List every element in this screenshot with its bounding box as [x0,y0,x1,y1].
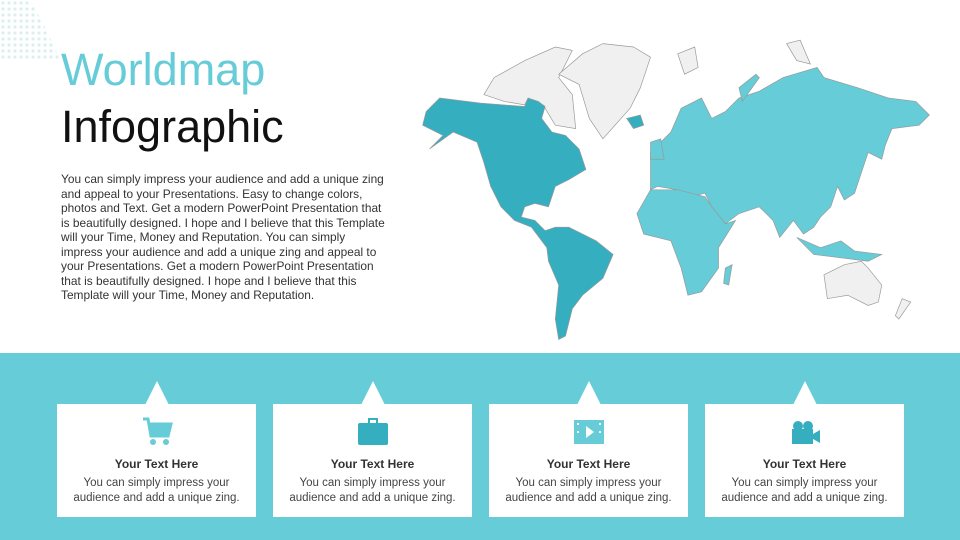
card 4: camera: You can simply impress your [732,477,877,489]
card 3: video: You can simply impress your [516,477,661,489]
text block: impress your audience and add a unique zing and appeal to [61,244,376,258]
text block [61,172,385,302]
card 4: camera: Your Text Here [763,457,846,471]
text block: and appeal to your Presentations. Easy to change colors, [61,186,362,200]
icon: film [574,420,604,444]
card 2: briefcase [273,404,472,517]
card 1: shopping [57,404,256,517]
card 4: camera [705,404,904,517]
text block: is beautifully designed. I hope and I believe that this Template [61,216,385,230]
bottom band [0,353,960,540]
map: americas [423,98,644,339]
card 4: camera: audience and add a unique zing. [721,492,888,504]
card 1: shopping: audience and add a unique zing. [73,492,240,504]
map: eurasia & africa [637,67,929,295]
card 2: briefcase: audience and add a unique zing. [289,492,456,504]
map: australia [824,261,911,319]
card 1: shopping: Your Text Here [115,457,198,471]
text block: photos and Text. Get a modern PowerPoint Presentation that [61,201,381,215]
text block: that is beautifully designed. I hope and I believe that this [61,274,356,288]
icon: video camera [792,421,820,444]
card 3: video: Your Text Here [547,457,630,471]
text block: your Presentations. Get a modern PowerPoint Presentation [61,259,374,273]
title [61,44,284,152]
card 1: shopping: You can simply impress your [84,477,229,489]
decorative dots [2,2,58,58]
map: arctic & greenland [484,40,810,139]
card 3: video: audience and add a unique zing. [505,492,672,504]
text block: Template will your Time, Money and Reputation. [61,288,314,302]
card 2: briefcase: You can simply impress your [300,477,445,489]
world map [422,40,930,340]
title: Worldmap [61,44,265,95]
icon: briefcase [358,418,388,445]
icon: cart [143,418,173,445]
card 2: briefcase: Your Text Here [331,457,414,471]
card 3: video [489,404,688,517]
title: Infographic [61,101,284,152]
text block: will your Time, Money and Reputation. You can simply [61,230,345,244]
text block: You can simply impress your audience and add a unique zing [61,172,384,186]
